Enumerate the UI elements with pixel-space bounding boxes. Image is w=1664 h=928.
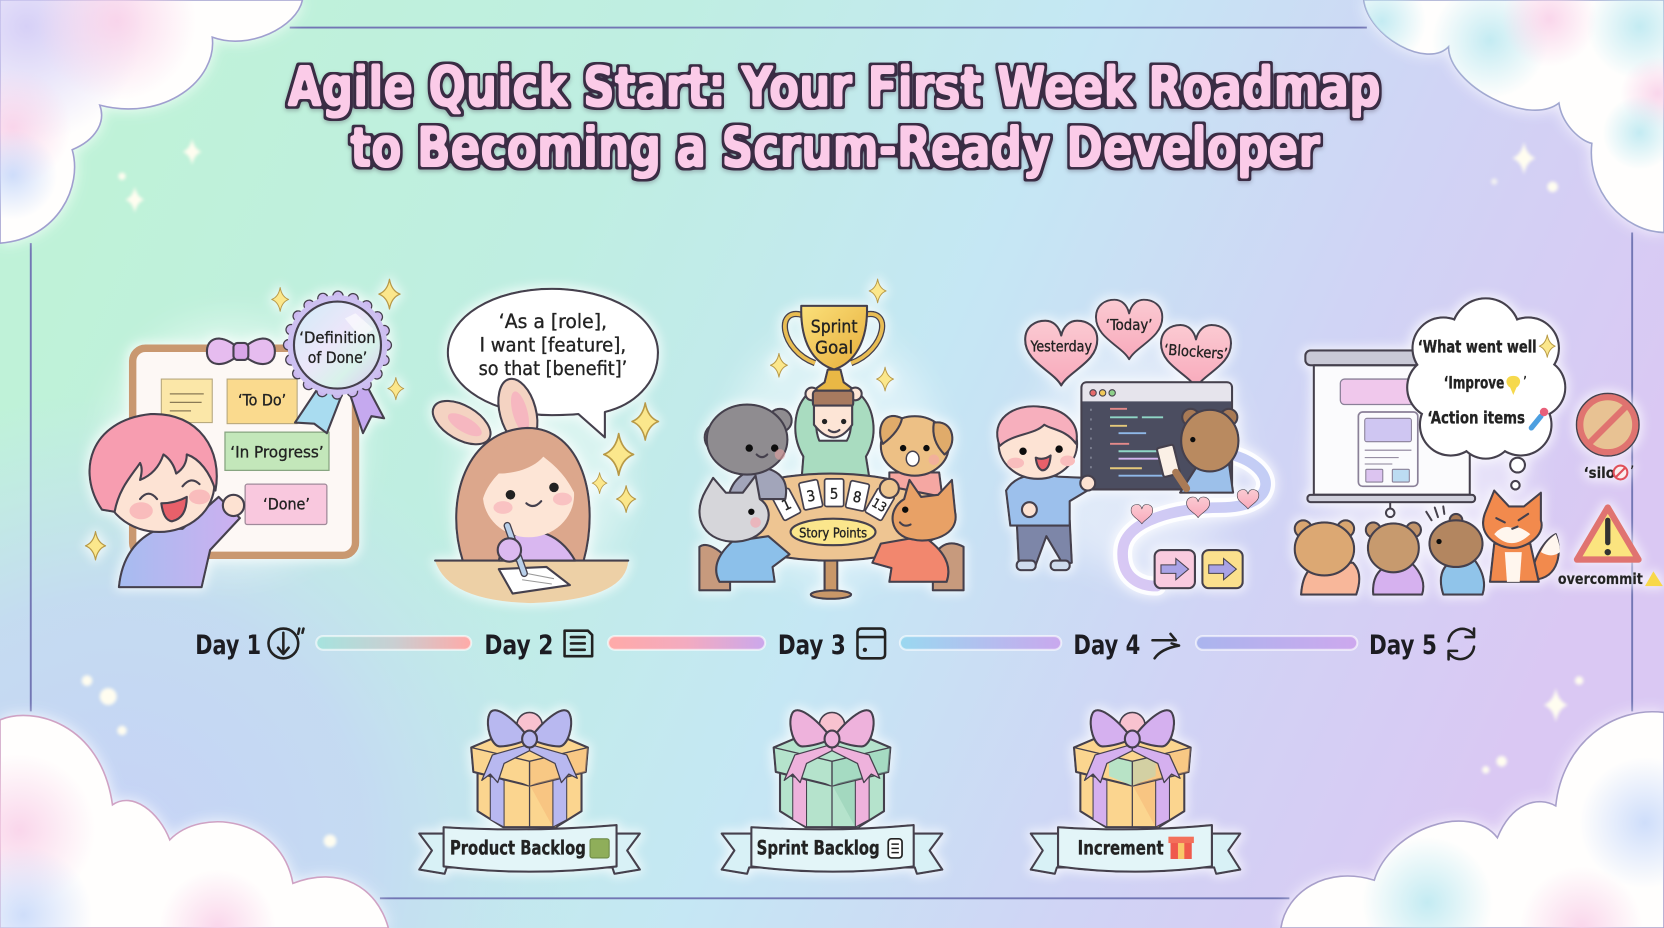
- day 1 label: [195, 629, 304, 661]
- speech bubble: user story template: [448, 289, 658, 437]
- heart: Yesterday: Yesterday: [1029, 337, 1092, 355]
- progress bar: day 3 to day 4: [900, 636, 1061, 650]
- audience bear: blue shirt: [1426, 506, 1484, 595]
- person holding trophy: [795, 388, 874, 483]
- gift box: orange and green: [1074, 710, 1191, 827]
- no silos sign: ’: [1630, 463, 1634, 481]
- gift box: green: [774, 710, 890, 827]
- table with planning cards: 13: [869, 496, 889, 516]
- overcommit warning sign: overcommit: [1558, 570, 1643, 588]
- trophy: Sprint Goal: [785, 306, 882, 391]
- day 2 label: Day 2: [484, 630, 553, 661]
- table with planning cards: 1: [779, 495, 794, 515]
- heart: Yesterday: [1025, 321, 1097, 385]
- bunny girl writing: [426, 374, 628, 603]
- pink haired boy pointing: [90, 414, 244, 587]
- sticky note: To Do: [227, 379, 297, 424]
- timeline: [195, 629, 1474, 661]
- scene: day 2 user story: [426, 289, 658, 603]
- cloud: top left corner: [0, 0, 302, 243]
- gold sparkles: [85, 279, 404, 560]
- sticky note: To Do: ‘To Do’: [238, 391, 286, 410]
- heart: Blockers: [1161, 325, 1231, 388]
- title: to Becoming a Scrum-Ready Developer: [350, 117, 1321, 181]
- arrow card: yellow: [1202, 550, 1243, 588]
- gray cat with chair: [699, 476, 790, 590]
- banner: Product Backlog: [419, 825, 640, 874]
- fox: [1483, 491, 1560, 582]
- code editor window: [1081, 382, 1232, 489]
- table with planning cards: 5: [830, 485, 838, 503]
- rosette badge: Definition of Done: ‘Definition: [299, 328, 376, 347]
- bear with card: [1157, 409, 1238, 493]
- rosette badge: Definition of Done: [288, 295, 387, 433]
- banner: Increment: Increment: [1078, 837, 1164, 860]
- no silos sign: ‘silo: [1584, 464, 1615, 482]
- gold sparkles: [770, 279, 894, 391]
- trophy: Sprint Goal: Sprint: [811, 316, 857, 337]
- thought cloud: retrospective prompts: [1408, 299, 1564, 489]
- heart: Today: ‘Today’: [1106, 316, 1152, 334]
- day 5 label: Day 5: [1369, 630, 1437, 661]
- projector screen: [1305, 350, 1475, 517]
- pink bow: [207, 339, 275, 364]
- progress bar: day 2 to day 3: [608, 636, 765, 650]
- title: [288, 56, 1381, 181]
- thought cloud: retrospective prompts: ’: [1523, 374, 1527, 390]
- cloud: bottom right corner: [1281, 712, 1664, 928]
- banner: Product Backlog: Product Backlog: [450, 837, 586, 860]
- table with planning cards: [712, 474, 950, 599]
- table with planning cards: Story Points: [799, 526, 867, 541]
- orange cat with chair: [872, 480, 964, 590]
- sticky note: In Progress: ‘In Progress’: [230, 443, 324, 462]
- sticky note: Done: [245, 484, 327, 525]
- cloud: top right corner: [1364, 0, 1664, 233]
- progress bar: day 1 to day 2: [316, 636, 471, 650]
- day 5 label: [1369, 629, 1474, 661]
- speech bubble: user story template: ‘As a [role],: [499, 310, 607, 333]
- scene: day 3 sprint planning: [699, 279, 964, 599]
- heart: Today: [1096, 300, 1162, 359]
- scene: day 5 retrospective: [1295, 299, 1663, 595]
- table with planning cards: 8: [851, 488, 863, 507]
- arrow card: pink: [1155, 550, 1195, 588]
- winding road with hearts: [1123, 454, 1266, 586]
- cloud: bottom left corner: [0, 715, 388, 928]
- rosette badge: Definition of Done: of Done’: [308, 348, 367, 367]
- overcommit warning sign: [1558, 508, 1663, 588]
- scene: day 1 kanban board: [85, 279, 404, 587]
- artifact: Increment: [1031, 710, 1240, 874]
- day 3 label: [778, 629, 885, 661]
- progress bar: day 4 to day 5: [1196, 636, 1357, 650]
- thought cloud: retrospective prompts: ‘What went well: [1418, 338, 1537, 358]
- banner: Sprint Backlog: [722, 825, 942, 874]
- day 3 label: Day 3: [778, 630, 846, 661]
- artifact: Product Backlog: [419, 710, 640, 874]
- artifact: Sprint Backlog: [722, 710, 942, 874]
- trophy: Sprint Goal: Goal: [815, 338, 853, 359]
- heart: Blockers: ‘Blockers’: [1164, 341, 1228, 363]
- audience bear: purple shirt: [1366, 522, 1423, 595]
- tan dog: [880, 416, 952, 498]
- scene: day 4 daily standup: [997, 300, 1266, 588]
- thought cloud: retrospective prompts: ‘Action items: [1427, 409, 1525, 429]
- sticky note: Done: ‘Done’: [263, 495, 310, 514]
- gift box: orange: [471, 710, 588, 827]
- audience bear: peach shirt: [1295, 520, 1359, 595]
- banner: Sprint Backlog: Sprint Backlog: [757, 837, 880, 860]
- day 4 label: Day 4: [1073, 630, 1140, 661]
- banner: Increment: [1031, 825, 1240, 874]
- day 1 label: Day 1: [195, 630, 261, 661]
- kanban board frame: [133, 348, 356, 555]
- speech bubble: user story template: I want [feature],: [480, 333, 626, 356]
- no silos sign: [1576, 393, 1639, 482]
- table with planning cards: 3: [805, 487, 817, 506]
- thought cloud: retrospective prompts: ‘Improve: [1444, 374, 1504, 394]
- soft glow behind scenes: [106, 319, 1528, 584]
- gray bear: [705, 405, 792, 499]
- title: Agile Quick Start: Your First Week Roadmap: [288, 56, 1381, 120]
- blank sticky note: [161, 379, 212, 423]
- speech bubble: user story template: so that [benefit]’: [479, 357, 627, 380]
- gold sparkles: [592, 403, 658, 512]
- pink haired presenter: [997, 406, 1095, 570]
- sticky note: In Progress: [225, 432, 329, 470]
- background sparkles: [82, 138, 1583, 847]
